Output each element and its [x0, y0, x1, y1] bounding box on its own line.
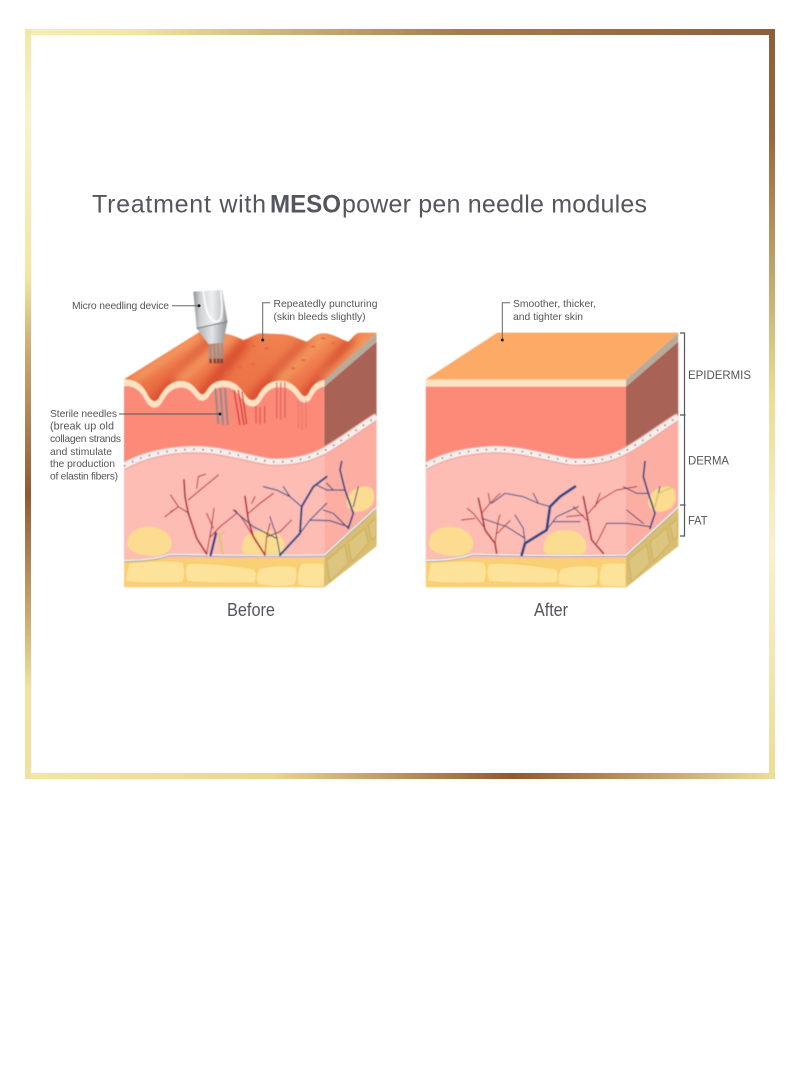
callout: smoother, thicker, and tighter skin: Smoother, thicker,	[513, 299, 596, 310]
callout: sterile needles: the production	[50, 459, 115, 470]
title: MESO	[270, 190, 341, 218]
callout: smoother, thicker, and tighter skin	[501, 299, 596, 342]
callout: micro needling device: Micro needling device	[72, 301, 169, 312]
needle puncture tracks	[234, 382, 306, 430]
red blood vessels	[462, 487, 637, 553]
layer label: fat: FAT	[688, 514, 708, 528]
wave skin surface	[124, 332, 377, 404]
smooth skin surface	[426, 333, 679, 379]
callout: smoother, thicker, and tighter skin: and tighter skin	[513, 312, 583, 323]
red blood vessels	[165, 474, 292, 555]
diagram: before skin cube	[124, 290, 377, 587]
callout: repeatedly puncturing: (skin bleeds slightly)	[274, 312, 366, 323]
callout: repeatedly puncturing: Repeatedly puncturing	[274, 299, 378, 310]
callout: sterile needles: collagen strands	[50, 434, 121, 445]
gold gradient frame	[25, 29, 775, 779]
title: power pen needle modules	[342, 190, 647, 218]
title	[92, 190, 647, 218]
cube layers: epidermis, derma, fat	[426, 333, 678, 587]
caption: after: After	[534, 600, 568, 620]
callout: sterile needles: and stimulate	[50, 447, 112, 458]
blue blood vessels	[482, 462, 672, 555]
callout: sterile needles: Sterile needles	[50, 409, 117, 420]
sterile needles in skin	[215, 388, 228, 425]
callout: sterile needles: (break up old	[50, 420, 114, 432]
title: Treatment with	[92, 190, 266, 218]
callout: repeatedly puncturing	[261, 299, 378, 342]
diagram: after skin cube	[426, 333, 679, 587]
blue blood vessels	[211, 462, 358, 555]
layer label: derma: DERMA	[688, 454, 729, 468]
icon: micro needling device	[193, 290, 227, 363]
cube layers: epidermis, derma, fat	[124, 333, 377, 587]
callout: sterile needles: of elastin fibers)	[50, 472, 118, 482]
layer bracket	[680, 333, 686, 536]
callout: sterile needles	[50, 409, 222, 482]
cream band under surface	[426, 379, 626, 387]
caption: before: Before	[227, 600, 275, 620]
layer label: epidermis: EPIDERMIS	[688, 368, 751, 382]
